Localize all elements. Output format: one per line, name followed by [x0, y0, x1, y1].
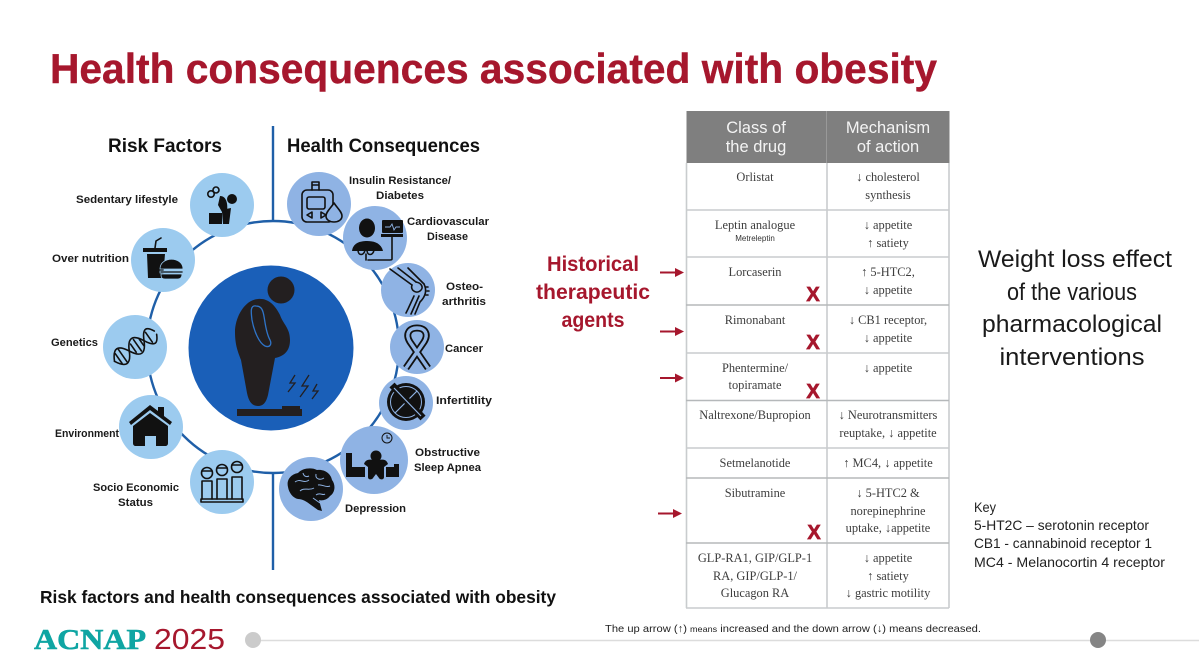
label: historical therapeutic agents: Historical — [547, 252, 639, 276]
row: GLP-1 agents: ↓ appetite — [864, 551, 913, 565]
row: phentermine/topiramate: X — [806, 381, 820, 403]
key — [974, 500, 1165, 570]
row: lorcaserin — [729, 265, 915, 306]
text: weight loss effect: of the various — [1007, 279, 1137, 306]
footer line with dots — [245, 632, 1199, 648]
consequence: depression — [279, 457, 406, 521]
consequence: cardiovascular disease: Cardiovascular — [407, 216, 490, 228]
arrows pointing to withdrawn drugs — [658, 268, 684, 518]
consequence: cancer: Cancer — [445, 343, 484, 355]
risk factor: sedentary lifestyle: Sedentary lifestyle — [76, 194, 178, 206]
label: historical therapeutic agents: agents — [562, 308, 625, 332]
row: setmelanotide — [720, 456, 933, 470]
consequence: depression: Depression — [345, 503, 406, 515]
consequence: osteoarthritis — [381, 263, 486, 317]
row: leptin analogue: ↑ satiety — [867, 236, 910, 250]
row: orlistat: ↓ cholesterol — [856, 170, 920, 184]
row: sibutramine — [725, 486, 931, 544]
table header: Mechanism — [846, 119, 930, 137]
row: phentermine/topiramate: ↓ appetite — [864, 361, 913, 375]
table grid — [686, 163, 949, 608]
risk factor: socio economic status: Socio Economic — [93, 482, 179, 494]
row: naltrexone/bupropion: Naltrexone/Bupropion — [699, 408, 811, 422]
text: weight loss effect: interventions — [1000, 344, 1144, 371]
heading: health consequences: Health Consequences — [287, 136, 480, 157]
consequence: osteoarthritis: arthritis — [442, 296, 486, 308]
row: lorcaserin: ↑ 5-HTC2, — [861, 265, 915, 279]
consequence: infertility: Infertitlity — [436, 395, 493, 407]
text: weight loss effect — [978, 246, 1172, 371]
consequence: obstructive sleep apnea: Obstructive — [415, 447, 480, 459]
row: naltrexone/bupropion — [699, 408, 938, 440]
row: sibutramine: Sibutramine — [725, 486, 786, 500]
risk factor: environment — [55, 395, 183, 459]
row: phentermine/topiramate — [722, 361, 913, 403]
row: rimonabant: ↓ CB1 receptor, — [849, 313, 927, 327]
risk factor: socio economic status: Status — [118, 497, 153, 509]
consequence: obstructive sleep apnea: Sleep Apnea — [414, 462, 482, 474]
row: GLP-1 agents: Glucagon RA — [721, 586, 789, 600]
row: leptin analogue: ↓ appetite — [864, 218, 913, 232]
risk factor: sedentary lifestyle — [76, 173, 254, 237]
key: CB1 - cannabinoid receptor 1 — [974, 536, 1152, 551]
row: phentermine/topiramate: Phentermine/ — [722, 361, 789, 375]
row: sibutramine: X — [807, 522, 821, 544]
table: drug classes and mechanism of action — [686, 111, 950, 608]
caption: risk factors and health consequences: Risk factors and health consequences associated with obesity — [40, 587, 556, 607]
row: leptin analogue: Leptin analogue — [715, 218, 796, 232]
row: GLP-1 agents: ↓ gastric motility — [846, 586, 931, 600]
key: MC4 - Melanocortin 4 receptor — [974, 555, 1165, 570]
row: naltrexone/bupropion: reuptake, ↓ appetite — [839, 426, 937, 440]
key: 5-HT2C – serotonin receptor — [974, 518, 1149, 533]
logo: ACNAP 2025 — [34, 624, 225, 653]
table header: the drug — [726, 138, 786, 156]
consequence: cancer — [390, 320, 484, 374]
consequence: insulin resistance / diabetes — [287, 172, 451, 236]
row: rimonabant — [725, 313, 927, 354]
consequence: cardiovascular disease — [343, 206, 490, 270]
row: rimonabant: ↓ appetite — [864, 331, 913, 345]
label: historical therapeutic agents — [536, 252, 650, 332]
row: leptin analogue — [715, 218, 913, 250]
risk factor: over nutrition: Over nutrition — [52, 253, 129, 265]
title: Health consequences associated with obesity — [50, 45, 937, 92]
row: sibutramine: norepinephrine — [850, 504, 926, 518]
row: GLP-1 agents: GLP-RA1, GIP/GLP-1 — [698, 551, 812, 565]
row: lorcaserin: ↓ appetite — [864, 283, 913, 297]
ring connector — [147, 126, 399, 570]
consequence: osteoarthritis: Osteo- — [446, 281, 483, 293]
consequence: obstructive sleep apnea — [340, 426, 482, 494]
row: rimonabant: Rimonabant — [725, 313, 786, 327]
risk factor: socio economic status — [93, 450, 254, 514]
central figure on scale — [188, 266, 354, 430]
row: GLP-1 agents: RA, GIP/GLP-1/ — [713, 569, 798, 583]
label: historical therapeutic agents: therapeutic — [536, 280, 650, 304]
consequence: infertility — [379, 376, 493, 430]
consequence: insulin resistance / diabetes: Diabetes — [376, 190, 424, 202]
row: naltrexone/bupropion: ↓ Neurotransmitters — [839, 408, 938, 422]
heading: risk factors: Risk Factors — [108, 136, 222, 157]
row: leptin analogue: Metreleptin — [735, 234, 775, 243]
row: lorcaserin: Lorcaserin — [729, 265, 781, 279]
row: rimonabant: X — [806, 332, 820, 354]
row: setmelanotide: Setmelanotide — [720, 456, 791, 470]
table header: of action — [857, 138, 919, 156]
risk factor: genetics — [51, 315, 167, 379]
row: sibutramine: uptake, ↓appetite — [846, 521, 931, 535]
text: weight loss effect: pharmacological — [982, 311, 1162, 338]
consequence: cardiovascular disease: Disease — [427, 231, 468, 243]
row: sibutramine: ↓ 5-HTC2 & — [856, 486, 920, 500]
consequence: insulin resistance / diabetes: Insulin Resistance/ — [349, 175, 451, 187]
row: orlistat: synthesis — [865, 188, 911, 202]
arrow legend note: The up arrow (↑) means increased and the down arrow (↓) means decreased. — [605, 623, 981, 635]
text: weight loss effect: Weight loss effect — [978, 246, 1172, 273]
row: phentermine/topiramate: topiramate — [729, 378, 782, 392]
row: GLP-1 agents — [698, 551, 931, 600]
risk factor: genetics: Genetics — [51, 337, 98, 349]
row: GLP-1 agents: ↑ satiety — [867, 569, 910, 583]
diagram: risk factors and health consequences — [51, 126, 493, 570]
row: setmelanotide: ↑ MC4, ↓ appetite — [843, 456, 933, 470]
row: orlistat — [736, 170, 920, 202]
row: orlistat: Orlistat — [736, 170, 774, 184]
row: lorcaserin: X — [806, 284, 820, 306]
key: Key — [974, 500, 996, 515]
risk factor: over nutrition — [52, 228, 195, 292]
table header: Class of — [726, 119, 786, 137]
table header — [686, 111, 950, 163]
risk factor: environment: Environment — [55, 428, 119, 440]
